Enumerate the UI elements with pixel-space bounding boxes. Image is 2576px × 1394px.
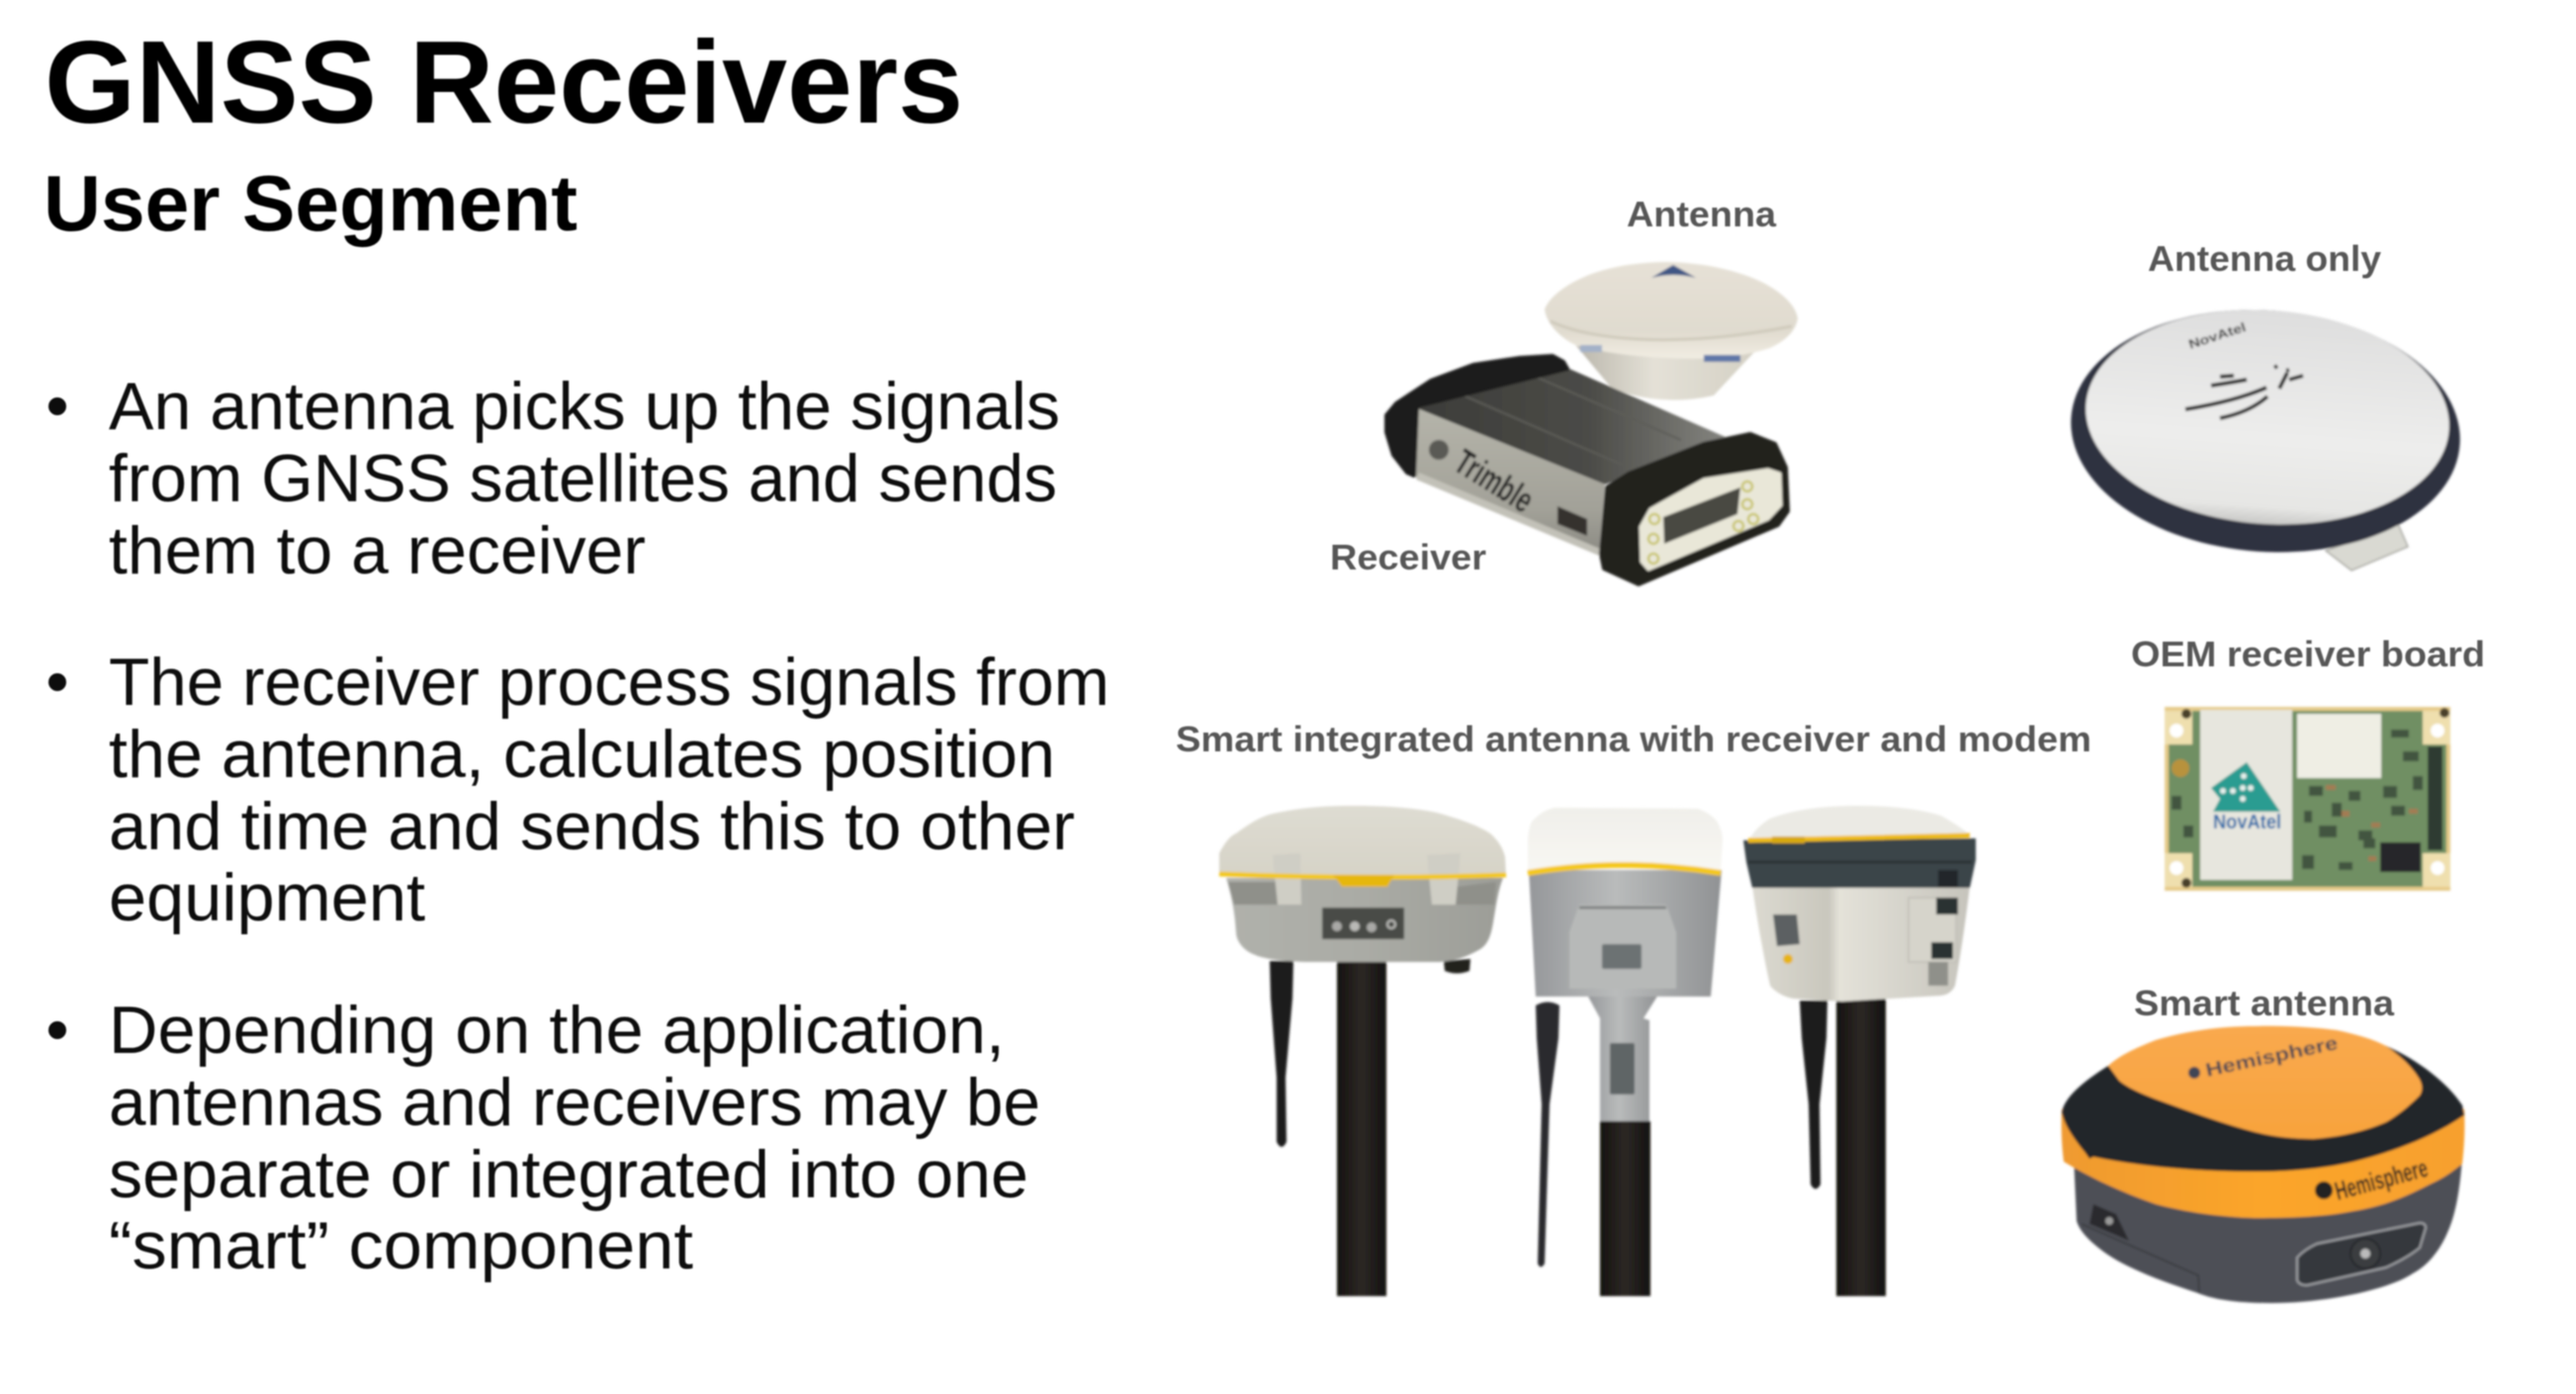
- receiver unit: [1386, 356, 1788, 584]
- title: GNSS Receivers: [44, 17, 963, 148]
- photo: antenna only: NovAtel: [2186, 319, 2248, 352]
- white top: [2079, 298, 2456, 537]
- grey body: [2074, 1157, 2462, 1303]
- label: antenna only: Antenna only: [2148, 238, 2381, 279]
- bracket: [2326, 524, 2408, 570]
- RF socket: [2172, 759, 2189, 777]
- front panel: [1569, 905, 1676, 989]
- orange lid: [2108, 1026, 2422, 1139]
- dark base: [2063, 298, 2468, 565]
- pole: [1337, 954, 1386, 1296]
- lower housing: [1226, 878, 1503, 962]
- Hemisphere logo on band: Hemisphere: [2332, 1153, 2431, 1206]
- dark top: [2062, 1028, 2464, 1172]
- connector: [2428, 746, 2443, 850]
- orange band: [2062, 1109, 2464, 1218]
- Hemisphere logo on lid: Hemisphere: [2204, 1033, 2340, 1082]
- photo: smart antenna on pole 2: [1528, 808, 1723, 1296]
- dome: [1219, 806, 1506, 876]
- Hemisphere logo on band: [2315, 1153, 2431, 1206]
- whip antenna: [1270, 961, 1293, 1147]
- bullet 2: and time and sends this to other: [109, 789, 1075, 864]
- Trimble logo mark: [1429, 440, 1449, 460]
- bullet 2: equipment: [109, 860, 425, 935]
- bullet 3: antennas and receivers may be: [109, 1065, 1040, 1140]
- mounting corners: [2165, 711, 2450, 887]
- photo: smart antenna Hemisphere: [2062, 1026, 2464, 1303]
- antenna dome: [1545, 262, 1798, 400]
- large shield with logo: [2200, 710, 2292, 880]
- label: smart integrated antenna: Smart integrated antenna with receiver and modem: [1176, 719, 2091, 759]
- NovAtel logo: NovAtel: [2213, 812, 2281, 833]
- antenna logo: [2185, 366, 2303, 418]
- side details: [1773, 915, 1800, 946]
- yellow band: [1528, 865, 1721, 873]
- label: smart antenna: Smart antenna: [2134, 983, 2395, 1023]
- pole: [1836, 999, 1886, 1296]
- photo: antenna only: [2063, 298, 2468, 570]
- Trimble brand text: Trimble: [1448, 441, 1541, 520]
- Hemisphere logo on lid: [2188, 1033, 2340, 1082]
- neck and grey tube: [1587, 995, 1658, 1121]
- photo: smart antenna on pole 1: [1219, 806, 1506, 1296]
- bullet 1: from GNSS satellites and sends: [109, 441, 1057, 516]
- whip antenna: [1536, 1002, 1559, 1267]
- bullet 3: Depending on the application,: [109, 993, 1005, 1068]
- yellow band: [1748, 835, 1970, 840]
- bullet 1: An antenna picks up the signals: [109, 369, 1060, 444]
- photo: OEM receiver board: [2165, 707, 2450, 891]
- white dome: [1750, 806, 1971, 837]
- bullet list: [48, 369, 1110, 1283]
- RTK badge: [1557, 506, 1587, 536]
- chip: [2380, 842, 2421, 872]
- bullet 2: [48, 645, 1110, 935]
- darker shoulder: [1228, 882, 1496, 905]
- display panel: [1322, 908, 1404, 939]
- dark band: [1743, 838, 1976, 888]
- label: receiver: Receiver: [1330, 537, 1486, 577]
- photo: antenna and receiver: [1386, 262, 1798, 584]
- small shield: [2297, 714, 2381, 778]
- bullet 3: “smart” component: [109, 1208, 693, 1283]
- control panel: [2297, 1223, 2426, 1285]
- whip antenna: [1800, 1001, 1827, 1188]
- bullet 1: them to a receiver: [109, 513, 646, 588]
- connector: [1444, 959, 1470, 973]
- bullet 3: separate or integrated into one: [109, 1137, 1028, 1212]
- side slot: [2089, 1204, 2129, 1241]
- bullet 3: [48, 993, 1040, 1283]
- bullet 2: The receiver process signals from: [109, 645, 1110, 720]
- subtitle: User Segment: [44, 159, 577, 247]
- seam: [2082, 1224, 2199, 1293]
- pole: [1600, 1121, 1650, 1296]
- label: antenna: Antenna: [1627, 194, 1777, 234]
- photo: smart antenna on pole 3: [1743, 806, 1976, 1296]
- bullet 1: [48, 369, 1060, 588]
- bullet 2: the antenna, calculates position: [109, 717, 1055, 792]
- ivory body: [1752, 886, 1970, 1002]
- white dome: [1528, 808, 1723, 872]
- circuit components: [2172, 730, 2423, 870]
- handles: [1273, 853, 1461, 905]
- label: OEM receiver board: OEM receiver board: [2131, 634, 2485, 674]
- yellow band: [1219, 874, 1506, 877]
- lower housing: [1529, 870, 1722, 997]
- NovAtel logo: [2211, 762, 2281, 833]
